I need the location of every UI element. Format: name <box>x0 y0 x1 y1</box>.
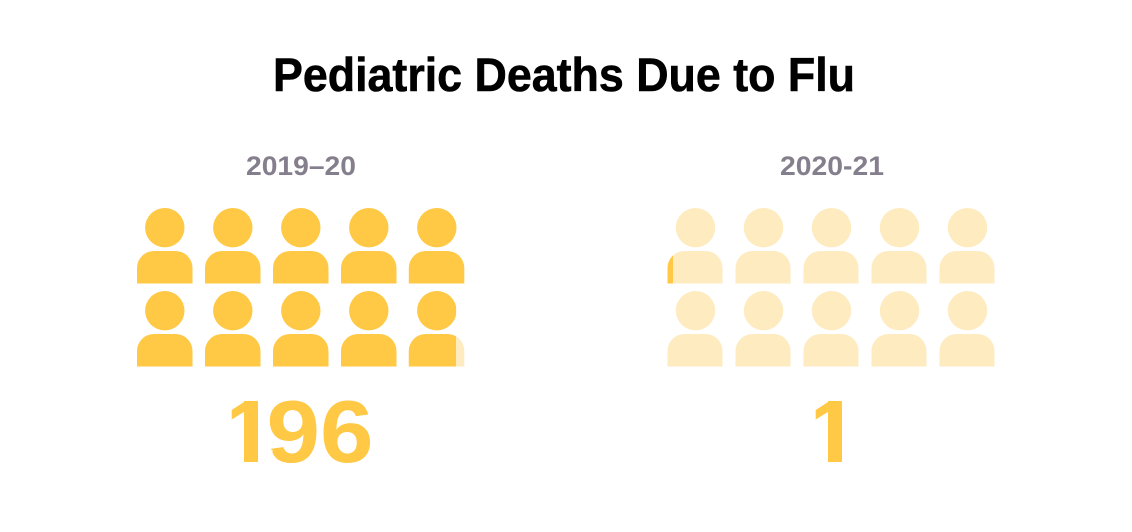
pictogram: 2020-21 people <box>668 208 994 366</box>
pictogram: 2019-20 people <box>137 208 464 366</box>
panel: 2020-21 <box>668 151 994 481</box>
heading: 2020-21: 2020-21 <box>780 151 884 181</box>
value: 196 <box>232 400 370 463</box>
panel: 2019-20 <box>137 151 464 481</box>
value: 1 <box>816 401 842 462</box>
heading: 2019-20: 2019–20 <box>246 151 356 181</box>
title: Pediatric Deaths Due to Flu <box>273 49 855 102</box>
infographic <box>137 56 994 463</box>
value: 196: 1 <box>224 382 273 481</box>
value: 1: 1 <box>808 382 857 481</box>
value: 196: 96 <box>266 382 374 481</box>
